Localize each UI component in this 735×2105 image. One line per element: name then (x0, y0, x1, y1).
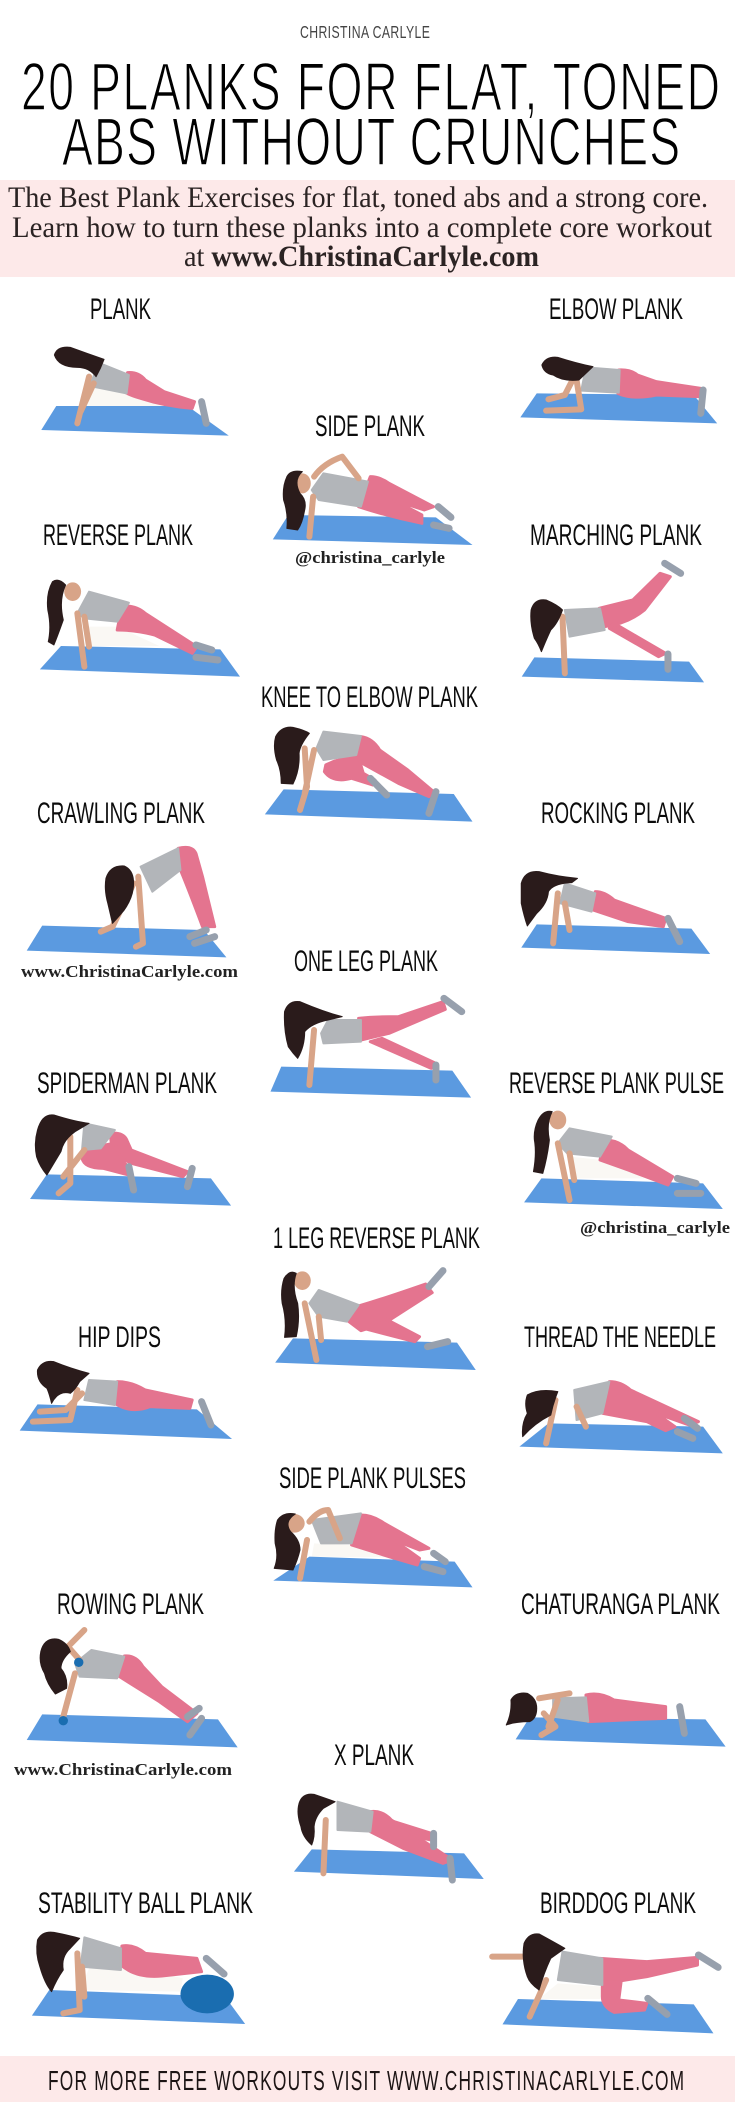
panel: hip dips: HIP DIPS (78, 1321, 161, 1354)
panel: 1 leg reverse plank: 1 LEG REVERSE PLANK (273, 1222, 480, 1255)
panel: reverse plank pulse: @christina_carlyle (580, 1218, 730, 1237)
panel: reverse plank: REVERSE PLANK (43, 519, 193, 552)
panel: crawling plank: CRAWLING PLANK (37, 797, 205, 830)
intro band (0, 180, 735, 277)
panel: crawling plank (21, 797, 238, 981)
panel: crawling plank: www.ChristinaCarlyle.com (21, 962, 238, 981)
panel: knee to elbow plank (261, 681, 478, 822)
panel: stability ball plank (32, 1887, 253, 2024)
footer band: FOR MORE FREE WORKOUTS VISIT WWW.CHRISTINACARLYLE.COM (48, 2065, 684, 2096)
panel: spiderman plank (30, 1067, 231, 1206)
intro band: The Best Plank Exercises for flat, toned abs and a strong core. (8, 181, 708, 214)
panel: side plank: @christina_carlyle (295, 548, 445, 567)
panel: 1 leg reverse plank (273, 1222, 480, 1370)
intro band: at www.ChristinaCarlyle.com (184, 240, 539, 273)
title (21, 49, 720, 180)
panel: rowing plank: www.ChristinaCarlyle.com (14, 1760, 232, 1779)
panel: reverse plank pulse (509, 1067, 730, 1237)
panel: x plank (294, 1739, 484, 1880)
footer band (0, 2056, 735, 2102)
panel: marching plank (522, 519, 704, 682)
panel: rocking plank (521, 797, 710, 954)
panel: side plank: SIDE PLANK (315, 410, 425, 443)
panel: thread the needle (519, 1321, 723, 1453)
panel: elbow plank (520, 293, 717, 423)
panel: x plank: X PLANK (334, 1739, 414, 1772)
panel: side plank pulses: SIDE PLANK PULSES (279, 1462, 466, 1495)
panel: spiderman plank: SPIDERMAN PLANK (37, 1067, 217, 1100)
panel: reverse plank (40, 519, 240, 677)
panel: rowing plank (14, 1588, 238, 1779)
panel: one leg plank: ONE LEG PLANK (294, 945, 438, 978)
panel: side plank (273, 410, 472, 567)
panel: hip dips (20, 1321, 232, 1439)
title: 20 PLANKS FOR FLAT, TONED (21, 49, 720, 125)
panel: rowing plank: ROWING PLANK (57, 1588, 204, 1621)
panel: knee to elbow plank: KNEE TO ELBOW PLANK (261, 681, 478, 714)
title: ABS WITHOUT CRUNCHES (62, 104, 680, 180)
panel: one leg plank (270, 945, 471, 1098)
brand name: CHRISTINA CARLYLE (300, 23, 430, 43)
panel: birddog plank (492, 1887, 718, 2033)
panel: side plank pulses (273, 1462, 472, 1587)
panel: stability ball plank: STABILITY BALL PLANK (38, 1887, 253, 1920)
panel: chaturanga plank (506, 1588, 726, 1747)
intro band: Learn how to turn these planks into a complete core workout (12, 211, 713, 244)
panel: plank: PLANK (90, 293, 151, 326)
panel: plank (41, 293, 229, 436)
